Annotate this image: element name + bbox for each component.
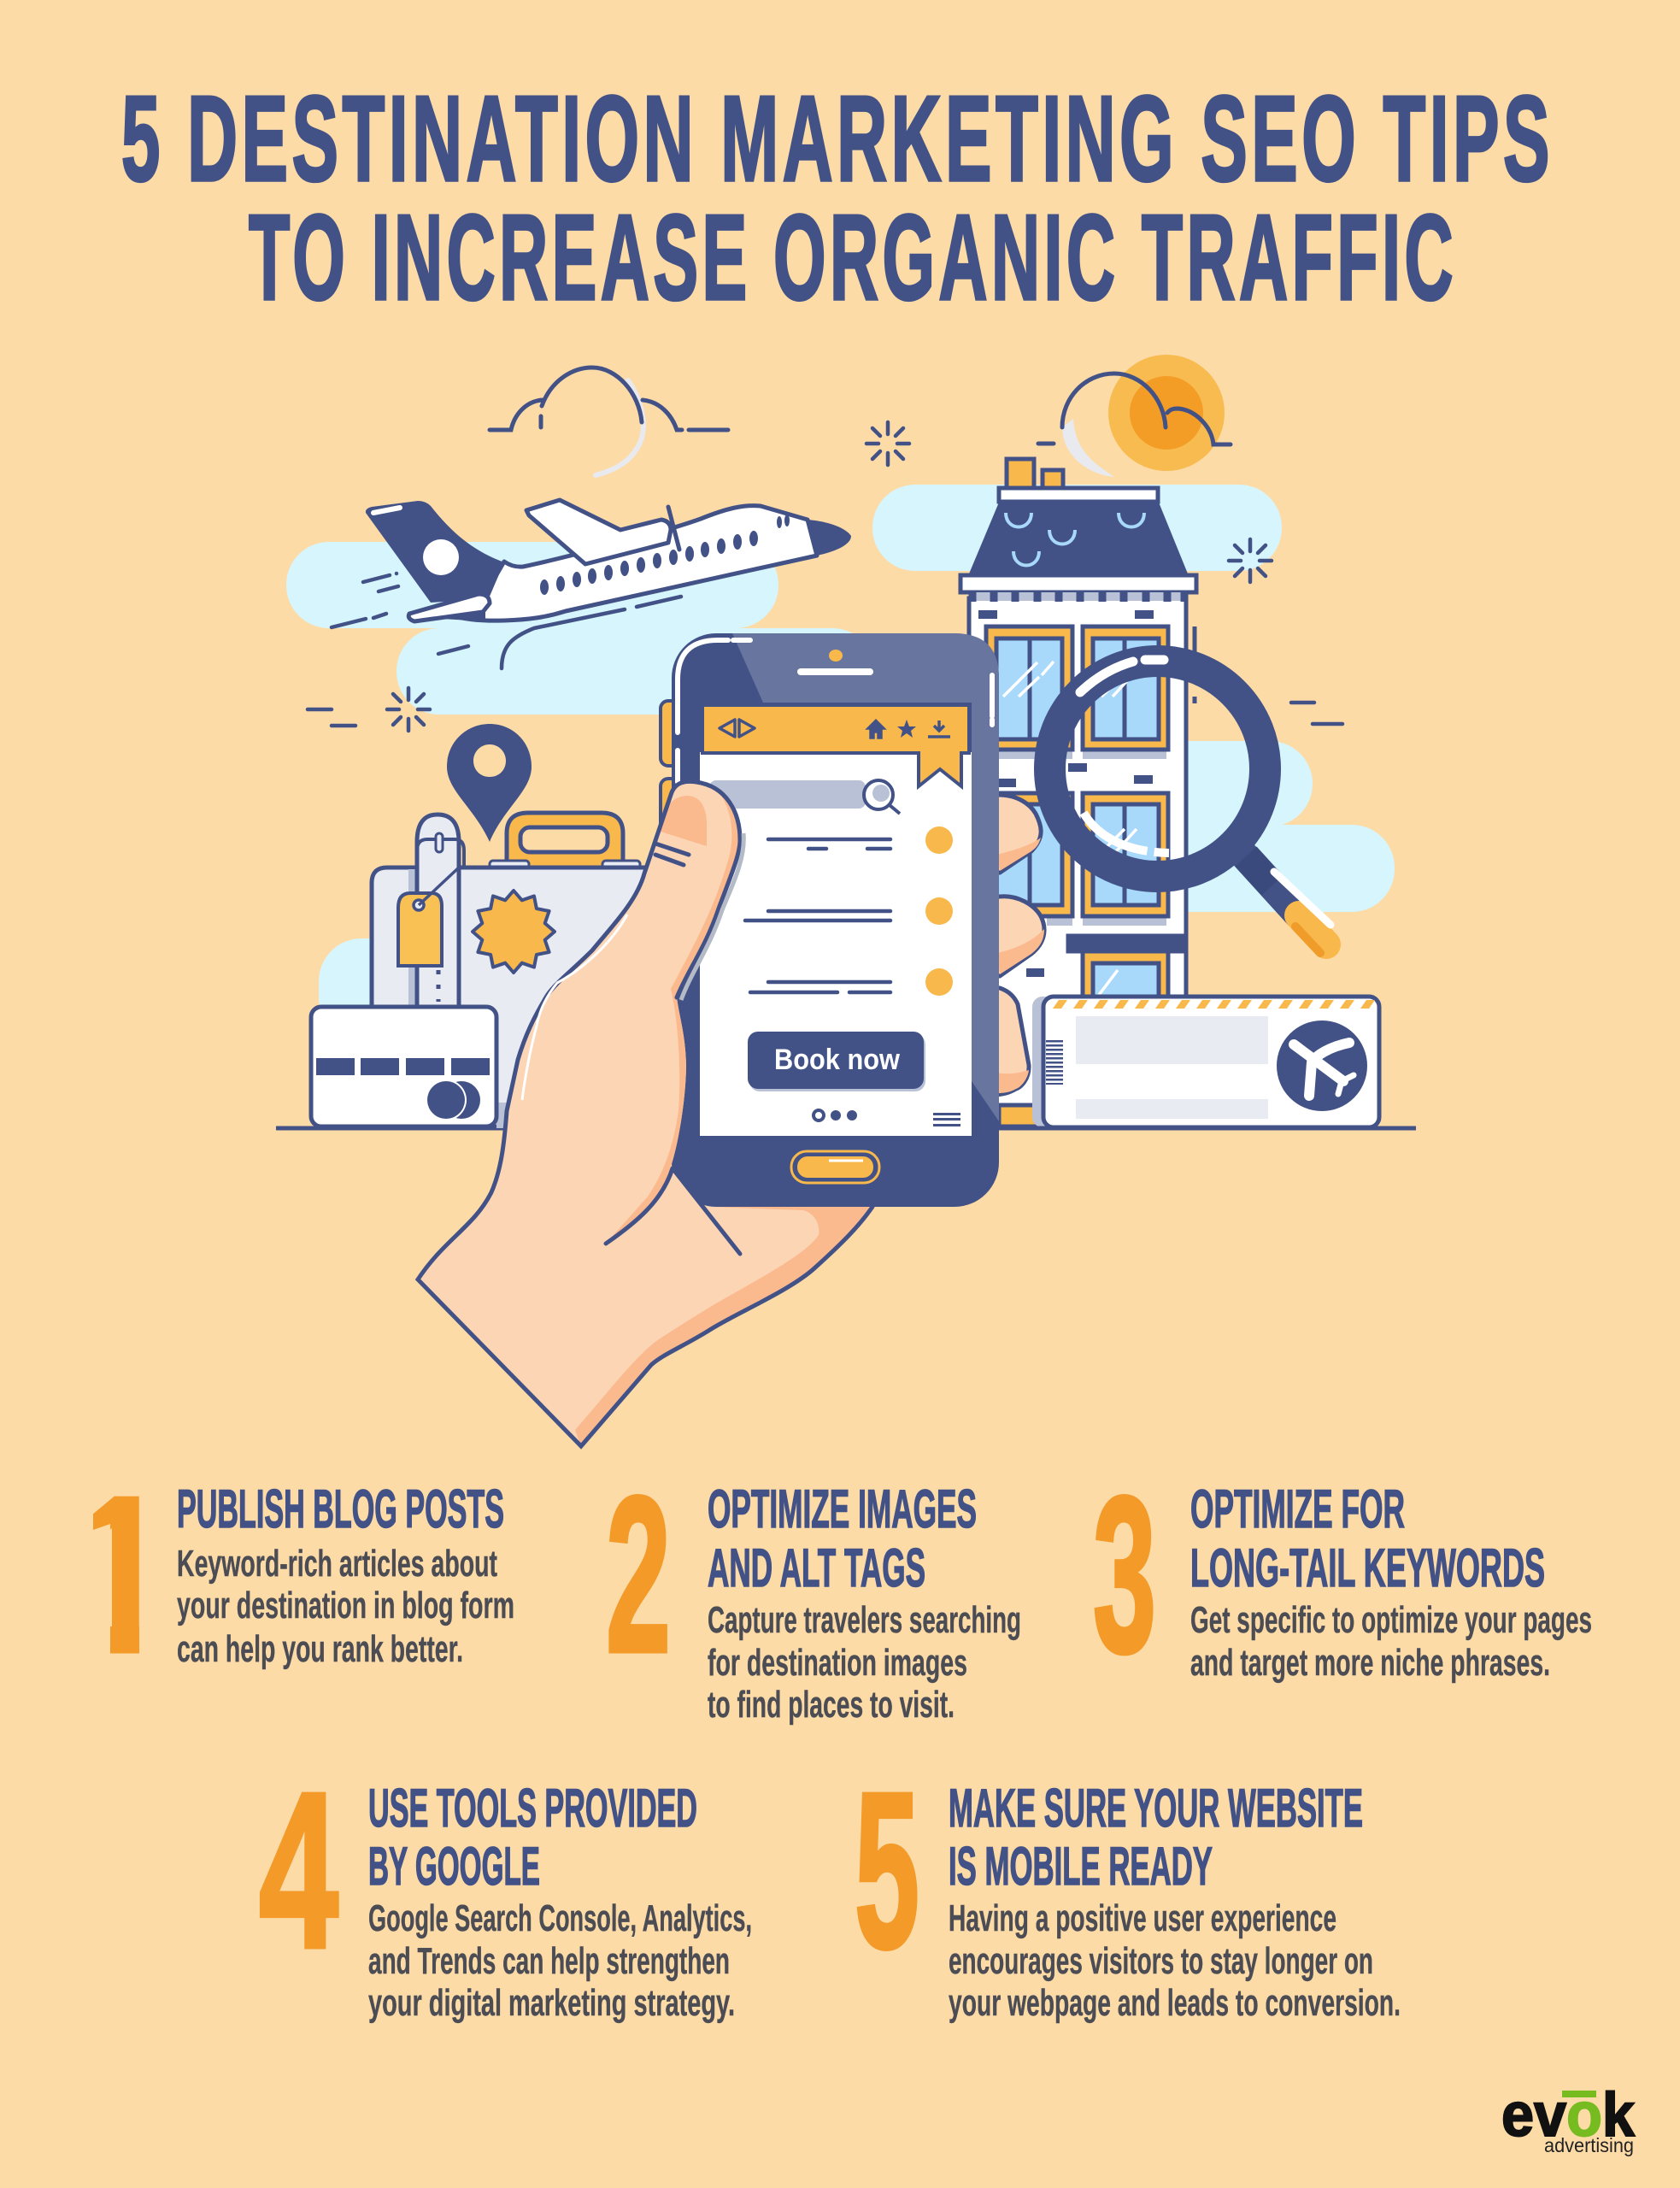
tip 2 (606, 1451, 1021, 1726)
home button (791, 1151, 879, 1183)
book now button (748, 1032, 925, 1091)
tip 1 (73, 1451, 514, 1699)
tip 5: your webpage and leads to conversion. (949, 1982, 1401, 2024)
tip 1: your destination in blog form (177, 1585, 514, 1626)
search bar (709, 780, 866, 809)
tip 1: Keyword-rich articles about (177, 1543, 497, 1585)
camera and speaker (829, 650, 843, 662)
tip 4: and Trends can help strengthen (368, 1940, 730, 1982)
tip 1: can help you rank better. (177, 1628, 463, 1670)
book now button: Book now (774, 1044, 900, 1076)
building (960, 459, 1196, 1126)
tip 1: PUBLISH BLOG POSTS (177, 1479, 504, 1539)
smartphone (661, 633, 999, 1207)
ground line (276, 1126, 1416, 1130)
pagination and menu (814, 1110, 960, 1126)
thumbnail (658, 796, 707, 846)
ticket (1032, 997, 1379, 1127)
sun (1108, 355, 1225, 471)
tip 5: IS MOBILE READY (949, 1837, 1213, 1897)
tip 4: your digital marketing strategy. (368, 1982, 735, 2024)
credit card (311, 1007, 507, 1128)
title (121, 71, 1554, 326)
tip 2: OPTIMIZE IMAGES (708, 1479, 977, 1539)
outlined cloud left (490, 368, 728, 475)
tip 2: 2 (606, 1451, 671, 1699)
magnifying glass (1049, 660, 1330, 953)
highlight (522, 915, 627, 1100)
tip 3 (1093, 1451, 1592, 1699)
tip 5: Having a positive user experience (949, 1897, 1336, 1939)
map pin (447, 724, 532, 842)
tip 5 (855, 1747, 1401, 2024)
outlines and creases (418, 781, 872, 1446)
windows (986, 626, 1183, 1126)
browser bar (702, 705, 969, 786)
logo: evok advertising: evok (1501, 2081, 1636, 2150)
tip 3: OPTIMIZE FOR (1190, 1479, 1405, 1539)
tip 2: to find places to visit. (708, 1684, 955, 1726)
tip 5: 5 (855, 1747, 919, 1995)
sparkles and dashes (308, 422, 1342, 731)
tip 2: Capture travelers searching (708, 1599, 1021, 1641)
tip 2: for destination images (708, 1642, 967, 1684)
tip 5: MAKE SURE YOUR WEBSITE (949, 1779, 1363, 1838)
tip 4: USE TOOLS PROVIDED (368, 1779, 697, 1838)
outlined cloud right (1038, 373, 1231, 477)
tip 4: Google Search Console, Analytics, (368, 1897, 752, 1939)
suitcase (372, 813, 658, 1126)
sky clouds (286, 485, 1395, 1041)
fingers (991, 795, 1044, 1095)
starburst sticker (473, 891, 555, 973)
screen (700, 752, 972, 1136)
tip 2: AND ALT TAGS (708, 1538, 925, 1598)
tip 4 (259, 1747, 752, 2024)
logo: evok advertising: advertising (1544, 2134, 1634, 2156)
airplane (332, 500, 851, 668)
tip 4: BY GOOGLE (368, 1837, 540, 1897)
listing lines (745, 839, 890, 992)
tip 3: 3 (1093, 1451, 1156, 1699)
tip 5: encourages visitors to stay longer on (949, 1940, 1373, 1982)
hand (418, 781, 872, 1446)
tip 4: 4 (259, 1747, 339, 1995)
tip 1: 1 (73, 1451, 169, 1699)
illustration: travel booking on a phone (276, 355, 1416, 1446)
luggage tag (398, 893, 442, 966)
